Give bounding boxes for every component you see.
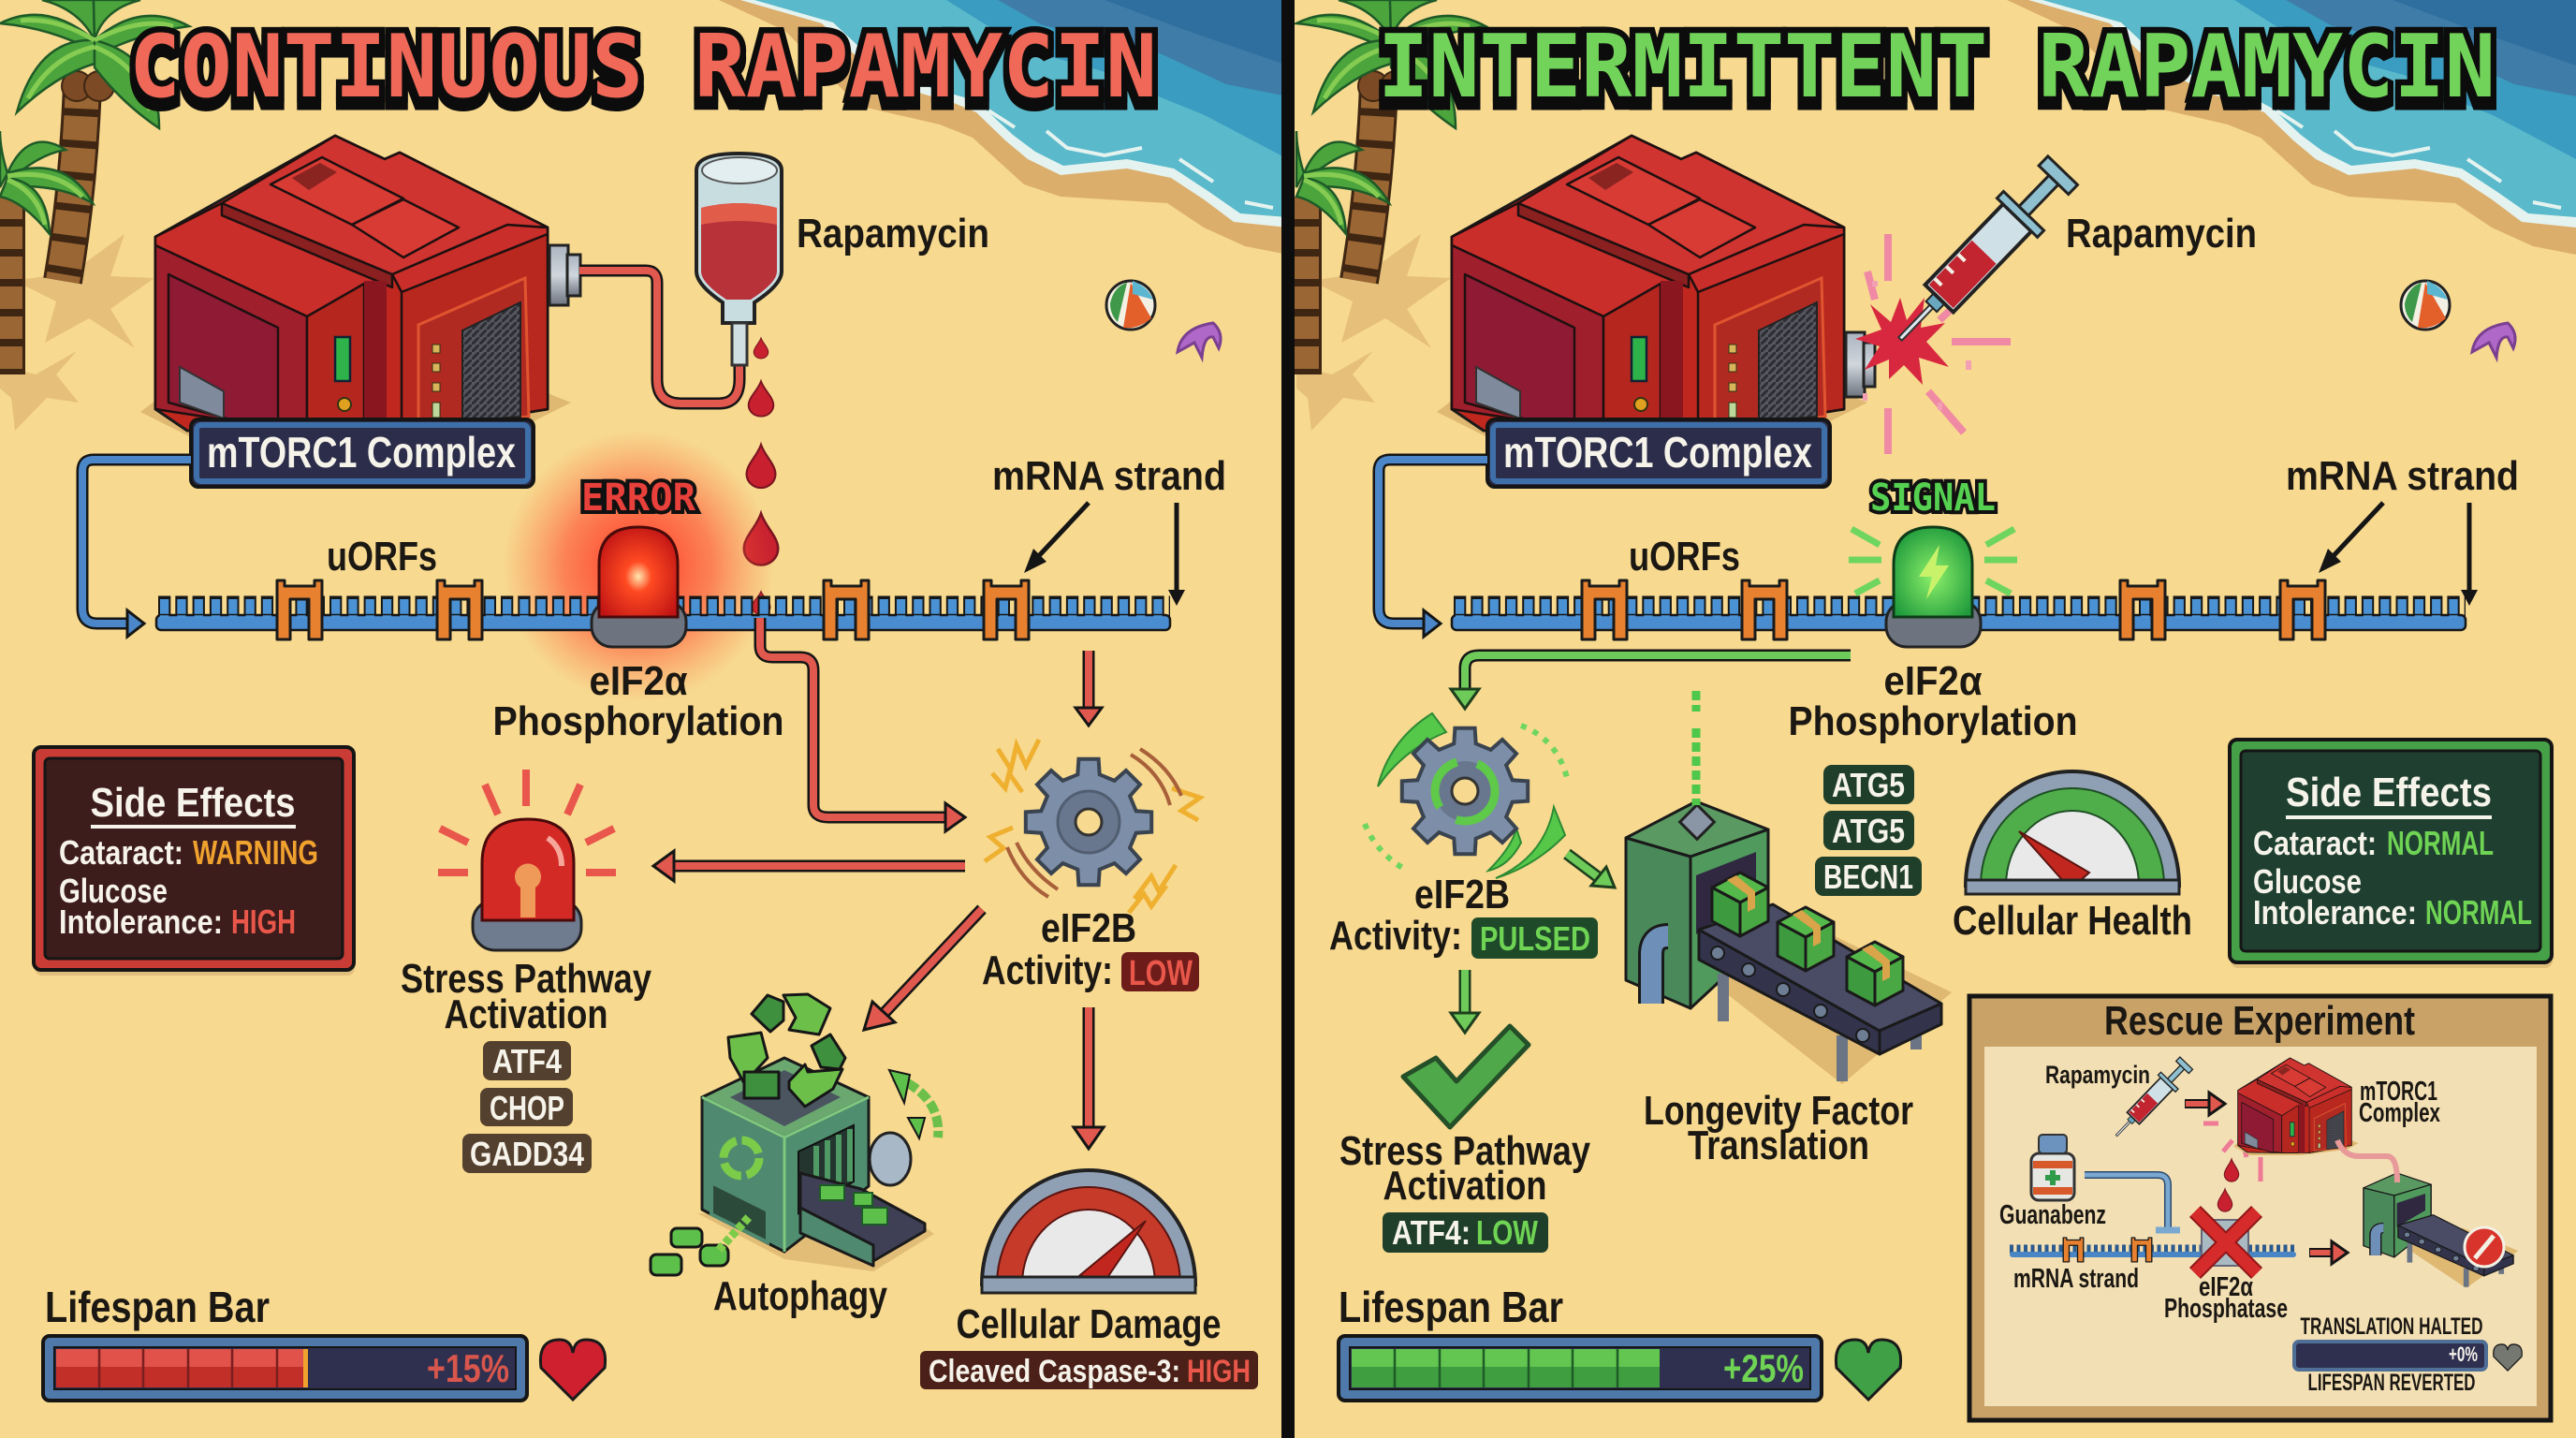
label: eIF2α Phosphorylation: Phosphorylation xyxy=(492,698,784,744)
panel: side effects: WARNING xyxy=(193,833,318,872)
mRNA strand xyxy=(156,607,1170,630)
label: mTORC1 Complex: mTORC1 Complex xyxy=(1503,428,1812,477)
icon: red heart xyxy=(540,1340,606,1400)
label: Longevity Factor Translation: Translation xyxy=(1688,1123,1869,1168)
label: eIF2B Activity LOW: eIF2B xyxy=(1041,905,1136,951)
arrow: eIF2B to autophagy xyxy=(864,909,982,1030)
icon: green heart xyxy=(1836,1340,1901,1400)
IV tube xyxy=(579,271,739,404)
label: eIF2α Phosphorylation: eIF2α xyxy=(590,658,687,704)
panel: side effects: NORMAL xyxy=(2387,824,2494,862)
icon: gear eIF2B xyxy=(985,740,1200,913)
pink tube xyxy=(2337,1140,2397,1182)
label: eIF2B Activity PULSED: Activity: xyxy=(1329,913,1462,959)
gauge: cellular health xyxy=(1966,771,2179,894)
label: mRNA strand: mRNA strand xyxy=(2286,453,2519,499)
label: Autophagy: Autophagy xyxy=(713,1273,887,1319)
chip: ATF4 LOW xyxy=(1383,1212,1548,1253)
icon: autophagy machine xyxy=(651,994,938,1275)
label: eIF2B Activity LOW xyxy=(982,905,1199,993)
chip: ATF4 LOW: LOW xyxy=(1476,1213,1538,1252)
uORF markers xyxy=(1582,580,2325,639)
label: mTORC1 Complex: mTORC1 xyxy=(2360,1077,2437,1107)
small drops xyxy=(2217,1159,2239,1211)
label: eIF2B Activity LOW: LOW xyxy=(1129,954,1193,993)
arrow: mTORC1 to mRNA xyxy=(82,460,191,637)
chip: ATG5 second: ATG5 xyxy=(1832,812,1905,850)
gauge: cellular damage xyxy=(982,1170,1195,1293)
label: Rapamycin: Rapamycin xyxy=(2066,211,2257,257)
label: Longevity Factor Translation: Longevity Factor xyxy=(1644,1088,1913,1134)
label: mTORC1 Complex xyxy=(191,419,534,487)
panel: side effects: Intolerance: xyxy=(2253,893,2417,932)
chip: Cleaved Caspase-3 HIGH: Cleaved Caspase-3: xyxy=(929,1354,1180,1389)
arrows: mRNA pointers xyxy=(2319,503,2478,606)
label: eIF2B Activity PULSED: PULSED xyxy=(1480,919,1590,958)
icon: translation machine xyxy=(1626,691,1952,1084)
uORF markers xyxy=(277,580,1029,639)
chip: ATF4 LOW: ATF4: xyxy=(1392,1213,1471,1252)
label: Rapamycin: Rapamycin xyxy=(797,211,989,257)
icon: guanabenz bottle xyxy=(2031,1135,2074,1200)
icon: small splash xyxy=(2203,1123,2261,1181)
icon: beach ball xyxy=(2401,281,2450,330)
arrow: eIF2B to stress xyxy=(653,851,965,881)
chip: CHOP: CHOP xyxy=(490,1089,564,1127)
icon: IV bottle xyxy=(696,154,782,365)
label: mTORC1 Complex xyxy=(1487,419,1830,487)
label: Guanabenz: Guanabenz xyxy=(1999,1200,2106,1230)
icon: green alarm xyxy=(1849,527,2017,647)
lifespan bar +0%: +0% xyxy=(2449,1343,2478,1366)
label: eIF2α Phosphatase: eIF2α xyxy=(2199,1272,2253,1302)
chip: GADD34: GADD34 xyxy=(470,1135,584,1173)
mRNA strand xyxy=(1452,607,2466,630)
small mRNA strand xyxy=(2010,1238,2296,1262)
label: TRANSLATION HALTED: TRANSLATION HALTED xyxy=(2301,1313,2482,1340)
rescue title: Rescue Experiment xyxy=(2104,998,2415,1044)
panel: side effects: HIGH xyxy=(231,902,296,941)
palm trees xyxy=(0,0,189,431)
arrow: gear down xyxy=(1451,970,1479,1033)
arrow: strand to eIF2B xyxy=(760,618,965,831)
icon: gear eIF2B pulsed xyxy=(1365,713,1568,878)
panel: side effects: Cataract: xyxy=(2253,824,2377,862)
panel: intermittent rapamycin xyxy=(1296,0,2576,1420)
panel: side effects: NORMAL xyxy=(2425,893,2532,932)
lifespan bar +0% xyxy=(2294,1342,2486,1370)
panel: side effects: Glucose xyxy=(2253,862,2362,901)
chip: BECN1: BECN1 xyxy=(1823,858,1913,896)
label: LIFESPAN REVERTED: LIFESPAN REVERTED xyxy=(2308,1370,2475,1396)
label: Stress Pathway Activation: Activation xyxy=(444,991,608,1037)
lifespan bar +25% xyxy=(1339,1336,1822,1401)
arrow: strand to gear xyxy=(1451,655,1851,709)
label: Cellular Damage: Cellular Damage xyxy=(957,1301,1221,1347)
mTORC1 machine xyxy=(140,136,580,440)
label: eIF2α Phosphorylation: eIF2α xyxy=(1883,658,1983,704)
label: eIF2α Phosphorylation xyxy=(492,658,784,744)
splash xyxy=(1855,234,2011,454)
label: mTORC1 Complex xyxy=(2359,1077,2440,1128)
panel: rescue experiment xyxy=(1969,996,2551,1420)
label: Stress Pathway Activation xyxy=(401,956,651,1037)
label: eIF2B Activity PULSED: eIF2B xyxy=(1414,872,1510,917)
icon: beach ball xyxy=(1106,281,1155,330)
icon: stress alarm xyxy=(438,770,616,950)
icon: stop sign xyxy=(2465,1227,2504,1267)
label: Lifespan Bar: Lifespan Bar xyxy=(1339,1283,1563,1331)
icon: small mTORC1 machine xyxy=(2233,1058,2359,1155)
arrows: mRNA pointers xyxy=(1024,503,1185,606)
icon: red alarm xyxy=(592,527,686,647)
lifespan bar +15% xyxy=(43,1336,527,1401)
glow xyxy=(503,431,774,702)
panel: side effects: Glucose xyxy=(59,872,168,910)
alarm with red X xyxy=(2195,1211,2257,1273)
arrow: mTORC1 to mRNA xyxy=(1379,460,1487,637)
lifespan bar +25%: +25% xyxy=(1723,1346,1804,1390)
arrow: to mTORC1 xyxy=(2185,1093,2225,1115)
label: mRNA strand: mRNA strand xyxy=(2013,1264,2139,1294)
panel: side effects: Side Effects xyxy=(2286,770,2492,815)
title: CONTINUOUS RAPAMYCIN xyxy=(129,16,1157,117)
label: Rapamycin: Rapamycin xyxy=(2045,1061,2150,1089)
arrow: eIF2B to damage xyxy=(1074,1007,1104,1149)
panel: side effects xyxy=(2230,740,2553,968)
panel: continuous rapamycin xyxy=(0,0,1288,1401)
icon: small translation machine xyxy=(2364,1173,2518,1288)
label: mRNA strand: mRNA strand xyxy=(992,453,1226,499)
label: eIF2α Phosphatase: Phosphatase xyxy=(2164,1294,2288,1324)
label: Stress Pathway Activation: Stress Pathway xyxy=(1339,1128,1590,1174)
palm trees xyxy=(1296,0,1486,431)
icon: syringe xyxy=(1880,151,2083,359)
chip: Cleaved Caspase-3 HIGH: HIGH xyxy=(1187,1354,1251,1389)
panel: side effects: Cataract: xyxy=(59,833,183,872)
label: Stress Pathway Activation: Activation xyxy=(1383,1163,1546,1209)
chip: ATG5: ATG5 xyxy=(1832,766,1905,804)
label: eIF2α Phosphorylation xyxy=(1788,658,2078,744)
title: INTERMITTENT RAPAMYCIN xyxy=(1378,16,2496,117)
icon: green check xyxy=(1403,1026,1529,1127)
panel: side effects: Side Effects xyxy=(90,780,296,826)
panel: side effects xyxy=(34,747,355,976)
arrow: to halted machine xyxy=(2309,1241,2348,1264)
label: uORFs: uORFs xyxy=(1629,534,1740,580)
chip: ATF4: ATF4 xyxy=(492,1042,562,1080)
ocean shoreline xyxy=(2007,0,2576,255)
label: eIF2B Activity PULSED xyxy=(1329,872,1598,959)
lifespan bar +15%: +15% xyxy=(427,1346,509,1390)
divider xyxy=(1281,0,1295,1438)
label: eIF2α Phosphatase xyxy=(2164,1272,2288,1324)
rapamycin drops xyxy=(744,338,778,614)
label: mTORC1 Complex: mTORC1 Complex xyxy=(207,428,516,477)
panel: side effects: Intolerance: xyxy=(59,902,223,941)
icon: grey heart xyxy=(2494,1344,2522,1371)
inhibition line xyxy=(2085,1175,2180,1230)
label: eIF2B Activity LOW: Activity: xyxy=(982,947,1113,993)
label: Lifespan Bar: Lifespan Bar xyxy=(45,1283,270,1331)
arrow: gear to machine xyxy=(1567,854,1615,888)
icon: seashell xyxy=(1178,323,1221,358)
icon: small syringe xyxy=(2108,1055,2195,1144)
icon: seashell xyxy=(2472,323,2515,358)
label: Cellular Health: Cellular Health xyxy=(1953,898,2192,944)
label: Stress Pathway Activation: Stress Pathway xyxy=(401,956,651,1002)
ERROR tag: ERROR xyxy=(581,477,696,520)
label: Stress Pathway Activation xyxy=(1339,1128,1590,1209)
label: eIF2α Phosphorylation: Phosphorylation xyxy=(1788,698,2078,744)
label: mTORC1 Complex: Complex xyxy=(2359,1098,2440,1128)
SIGNAL tag: SIGNAL xyxy=(1870,477,1996,520)
label: uORFs: uORFs xyxy=(327,534,437,580)
ocean shoreline xyxy=(719,0,1288,255)
arrow: strand down xyxy=(1076,651,1102,726)
mTORC1 machine xyxy=(1437,136,1875,440)
label: Longevity Factor Translation xyxy=(1644,1088,1913,1168)
